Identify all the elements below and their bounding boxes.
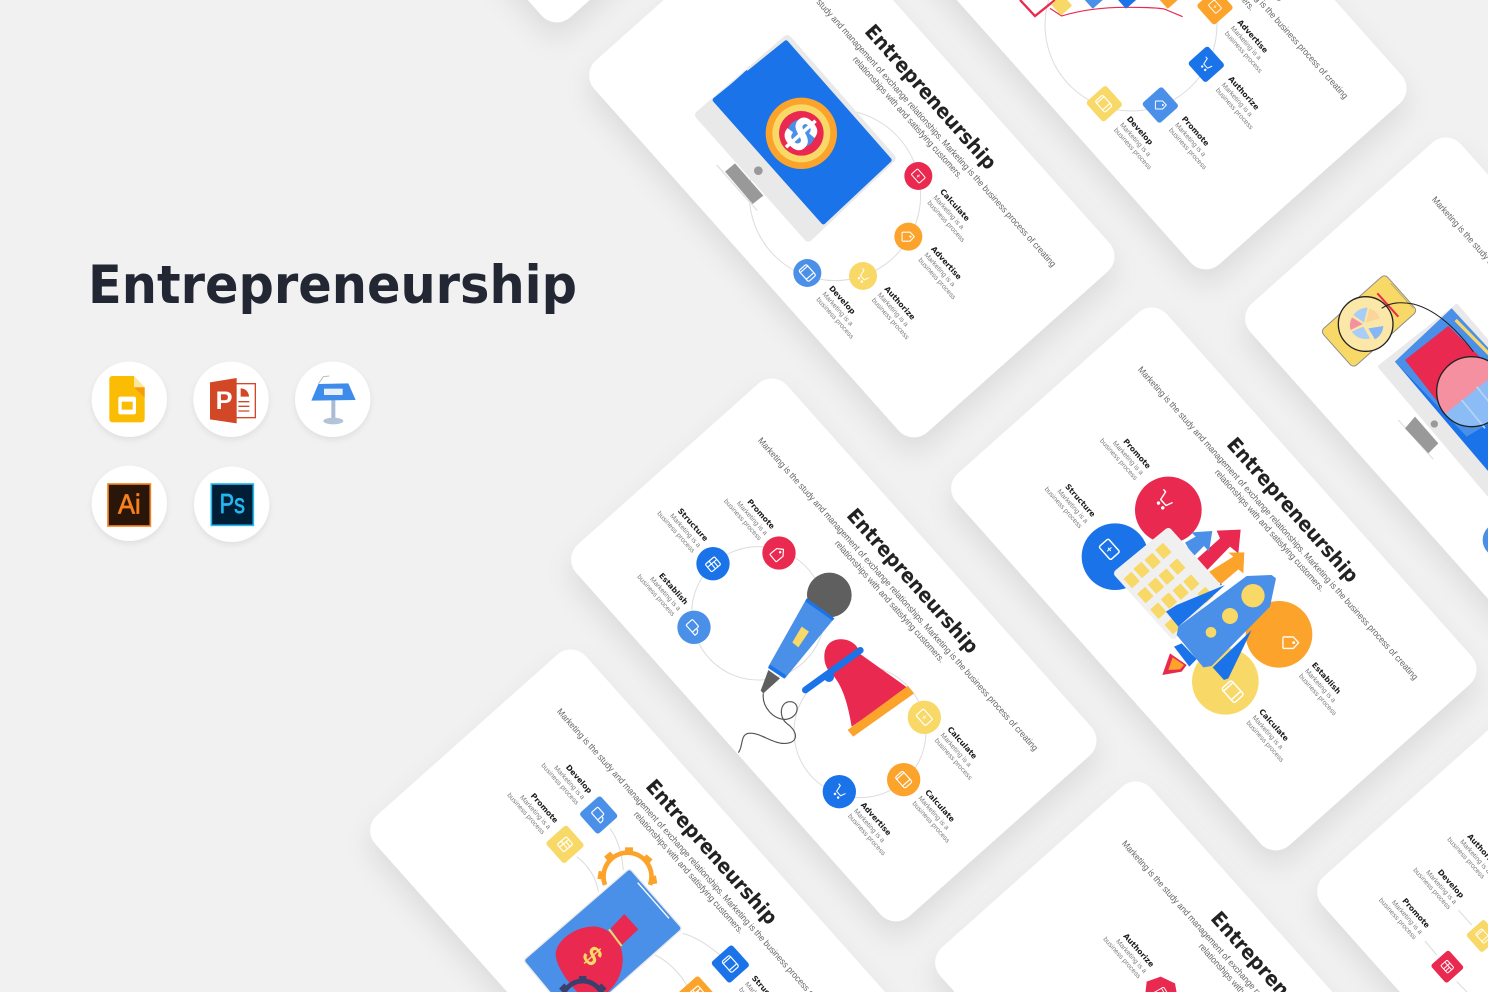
title: Entrepreneurship bbox=[88, 255, 577, 316]
step: promote bbox=[1142, 86, 1222, 172]
icon: dark gear bbox=[562, 976, 604, 992]
icon: Illustrator bbox=[92, 466, 167, 541]
icon: PowerPoint: P bbox=[216, 387, 233, 415]
step: develop: Develop bbox=[564, 763, 594, 795]
step: calculate bbox=[904, 162, 980, 244]
icon: phone bbox=[528, 873, 678, 992]
slide heading and description: relationships with and satisfying customers. bbox=[851, 54, 965, 180]
slide heading and description: Marketing is the study and management of exchange relationships. Marketing is the business process of creating bbox=[756, 435, 1040, 753]
step: structure bbox=[655, 498, 730, 580]
step: calculate: business process bbox=[925, 200, 966, 244]
step: develop bbox=[1086, 85, 1167, 172]
step: authorize: Marketing is a bbox=[876, 292, 909, 328]
illustration: microphone, megaphone and steps bbox=[635, 485, 988, 858]
step: calculate bbox=[1192, 648, 1299, 764]
step: promote: business process bbox=[505, 792, 546, 837]
illustration: authorize step: Authorize bbox=[1121, 932, 1156, 969]
step: calculate: Calculate bbox=[938, 187, 972, 223]
icon: yellow pie chart panel bbox=[1320, 274, 1473, 368]
icon: Google Slides bbox=[92, 362, 167, 437]
step: calculate: Marketing is a bbox=[1250, 714, 1284, 751]
step: advertise: business process bbox=[846, 813, 887, 858]
card: top-right diamond steps slide bbox=[873, 0, 1415, 278]
icon: money bag bbox=[556, 914, 638, 992]
step: calculate yellow: Calculate bbox=[946, 725, 979, 761]
step: advertise bbox=[823, 775, 901, 858]
step: calculate orange: Calculate bbox=[923, 788, 957, 824]
step: establish bbox=[1246, 601, 1352, 718]
step: structure: Structure bbox=[1063, 482, 1097, 519]
step: develop: Develop bbox=[827, 284, 858, 316]
step: promote bbox=[1098, 425, 1202, 543]
slide heading and description: Entrepreneurship bbox=[860, 19, 1002, 174]
step: establish: business process bbox=[635, 574, 676, 618]
icon: rocket bbox=[1162, 575, 1276, 680]
step: advertise: Marketing is a bbox=[1229, 25, 1262, 62]
card background bbox=[1237, 129, 1488, 689]
icon: Photoshop: Ps bbox=[220, 488, 245, 519]
step: develop: business process bbox=[1411, 867, 1452, 912]
step: establish: Establish bbox=[657, 571, 690, 606]
step: calculate: business process bbox=[1244, 720, 1285, 764]
card background bbox=[927, 773, 1469, 992]
icon: red route line bbox=[1020, 0, 1183, 17]
step: establish: business process bbox=[1297, 673, 1338, 718]
illustration: pie chart and monitor with magnifiers bbox=[1320, 274, 1488, 557]
step: develop: Marketing is a bbox=[820, 291, 854, 328]
card background bbox=[581, 0, 1123, 446]
step: calculate: Calculate bbox=[1257, 707, 1291, 743]
illustration: phone, money bag and steps bbox=[505, 750, 792, 992]
icon: orange gear bbox=[597, 847, 657, 885]
step: authorize: business process bbox=[1445, 836, 1486, 881]
step: advertise: Advertise bbox=[859, 800, 893, 837]
step: advertise bbox=[1196, 0, 1278, 75]
card: monitor slide bbox=[581, 0, 1123, 446]
slide heading and description: Entrepreneurship bbox=[641, 774, 783, 929]
step: promote: Promote bbox=[529, 791, 560, 825]
step: promote: business process bbox=[1098, 438, 1139, 482]
card: top-left partial slide bbox=[224, 0, 766, 31]
step: establish: Marketing is a bbox=[648, 576, 682, 613]
icon: megaphone bbox=[805, 639, 913, 736]
step: advertise: Marketing is a bbox=[922, 252, 956, 288]
card: megaphone and microphone slide bbox=[563, 370, 1105, 930]
step: authorize: business process bbox=[870, 297, 911, 342]
step: promote: business process bbox=[1377, 897, 1418, 942]
step: promote: business process bbox=[722, 498, 763, 543]
step: develop: Marketing is a bbox=[552, 765, 586, 801]
step: structure: Marketing is a bbox=[1056, 488, 1089, 525]
icon: Illustrator: Ai bbox=[118, 488, 141, 519]
illustration: monitor with coin and steps bbox=[699, 39, 980, 342]
step: calculate orange: business process bbox=[910, 800, 951, 845]
step: calculate yellow bbox=[908, 701, 988, 782]
step: calculate yellow: Marketing is a bbox=[939, 732, 972, 769]
step: authorize: Marketing is a bbox=[1220, 82, 1253, 118]
step: advertise: Marketing is a bbox=[852, 808, 886, 844]
step: calculate orange bbox=[887, 763, 965, 845]
step: structure bbox=[1043, 473, 1148, 590]
step: advertise: Advertise bbox=[1236, 18, 1270, 55]
step: promote: Marketing is a bbox=[518, 794, 552, 831]
illustration: linear steps bbox=[1377, 824, 1488, 992]
icon: dollar coin: $ bbox=[772, 107, 829, 162]
step: develop: Develop bbox=[1436, 868, 1466, 900]
card: bottom right slide bbox=[1309, 702, 1488, 992]
step: promote: Promote bbox=[1121, 437, 1153, 470]
icon: Keynote bbox=[295, 362, 370, 437]
step: develop: Develop bbox=[1125, 114, 1155, 147]
card background bbox=[563, 370, 1105, 930]
step: calculate orange: Marketing is a bbox=[916, 795, 950, 832]
icon: microphone bbox=[738, 573, 852, 753]
step: orange square bbox=[677, 975, 716, 992]
icon: step circle at edge bbox=[1483, 523, 1488, 557]
icon: money bag: $ bbox=[576, 940, 609, 972]
icon: building bbox=[1118, 532, 1217, 635]
step: structure: business process bbox=[1043, 486, 1083, 531]
icon: monitor bbox=[1380, 306, 1488, 500]
card: money bag slide bbox=[362, 641, 904, 992]
card background bbox=[873, 0, 1415, 278]
card: rocket slide bbox=[943, 299, 1485, 859]
step: calculate: Marketing is a bbox=[931, 194, 965, 231]
illustration: authorize step: Marketing is a bbox=[1114, 938, 1148, 975]
step: establish bbox=[635, 561, 711, 644]
illustration: ring of square steps bbox=[1020, 0, 1278, 172]
step: authorize: Authorize bbox=[1227, 74, 1261, 112]
card: chart monitor slide bbox=[1237, 129, 1488, 689]
icon: dollar coin bbox=[766, 98, 837, 169]
card background bbox=[943, 299, 1485, 859]
step: develop: Marketing is a bbox=[1424, 869, 1458, 906]
step: promote: Marketing is a bbox=[1111, 440, 1144, 477]
card background bbox=[362, 641, 904, 992]
step: authorize bbox=[849, 262, 925, 342]
illustration: rocket, building and steps bbox=[1043, 425, 1352, 764]
icon: growth arrows bbox=[1173, 530, 1244, 588]
step: develop: business process bbox=[814, 296, 855, 341]
step: promote: business process bbox=[1167, 127, 1208, 172]
step: authorize bbox=[1188, 46, 1269, 132]
step: structure: Marketing is a bbox=[668, 513, 702, 549]
step: develop: Marketing is a bbox=[1118, 122, 1152, 158]
slide heading and description: Entrepreneurship bbox=[1222, 432, 1364, 587]
card: bottom center slide bbox=[927, 773, 1469, 992]
step: advertise: business process bbox=[1223, 30, 1264, 75]
step: promote bbox=[1377, 884, 1464, 984]
step: advertise: business process bbox=[916, 257, 957, 302]
card background bbox=[1309, 702, 1488, 992]
slide heading and description: Marketing is the study and management of exchange relationships. Marketing is the business process of creating bbox=[1136, 364, 1420, 682]
step: develop: business process bbox=[539, 762, 580, 807]
slide heading and description: relationships with and satisfying customers. bbox=[833, 538, 947, 664]
step: promote: Promote bbox=[1400, 896, 1432, 930]
step: promote bbox=[722, 485, 796, 570]
icon: large magnifier bbox=[1437, 357, 1488, 428]
icon: monitor bbox=[699, 39, 891, 237]
step: promote: Marketing is a bbox=[735, 500, 768, 537]
slide heading and description: relationships with and satisfying customers. bbox=[1213, 467, 1327, 593]
step: promote: Promote bbox=[745, 497, 777, 531]
step: promote bbox=[505, 779, 585, 864]
panel: format icons bbox=[92, 362, 370, 542]
step: develop bbox=[1411, 854, 1488, 953]
step: promote: Marketing is a bbox=[1390, 899, 1423, 936]
step: structure bbox=[711, 944, 792, 992]
step: authorize: Authorize bbox=[883, 284, 917, 322]
icon: PowerPoint bbox=[193, 362, 269, 437]
icon: Photoshop bbox=[194, 467, 269, 542]
illustration: authorize step bbox=[1101, 923, 1177, 992]
slide heading and description: relationships with and satisfying customers. bbox=[632, 809, 746, 935]
step: promote: Promote bbox=[1180, 114, 1211, 148]
step: develop: business process bbox=[1112, 127, 1153, 172]
step: advertise bbox=[894, 223, 971, 302]
step: promote: Marketing is a bbox=[1173, 122, 1207, 158]
step: structure: business process bbox=[655, 510, 696, 555]
step: authorize: business process bbox=[1214, 87, 1255, 132]
step: establish: Marketing is a bbox=[1303, 668, 1337, 704]
step: structure: Structure bbox=[676, 506, 710, 543]
step: calculate yellow: business process bbox=[933, 737, 974, 782]
step: establish: Establish bbox=[1310, 660, 1343, 696]
slide heading and description: Entrepreneurship bbox=[842, 503, 984, 658]
step: develop bbox=[793, 259, 869, 341]
step: develop bbox=[539, 750, 618, 835]
step: advertise: Advertise bbox=[929, 244, 963, 281]
illustration: authorize step: business process bbox=[1101, 936, 1142, 981]
